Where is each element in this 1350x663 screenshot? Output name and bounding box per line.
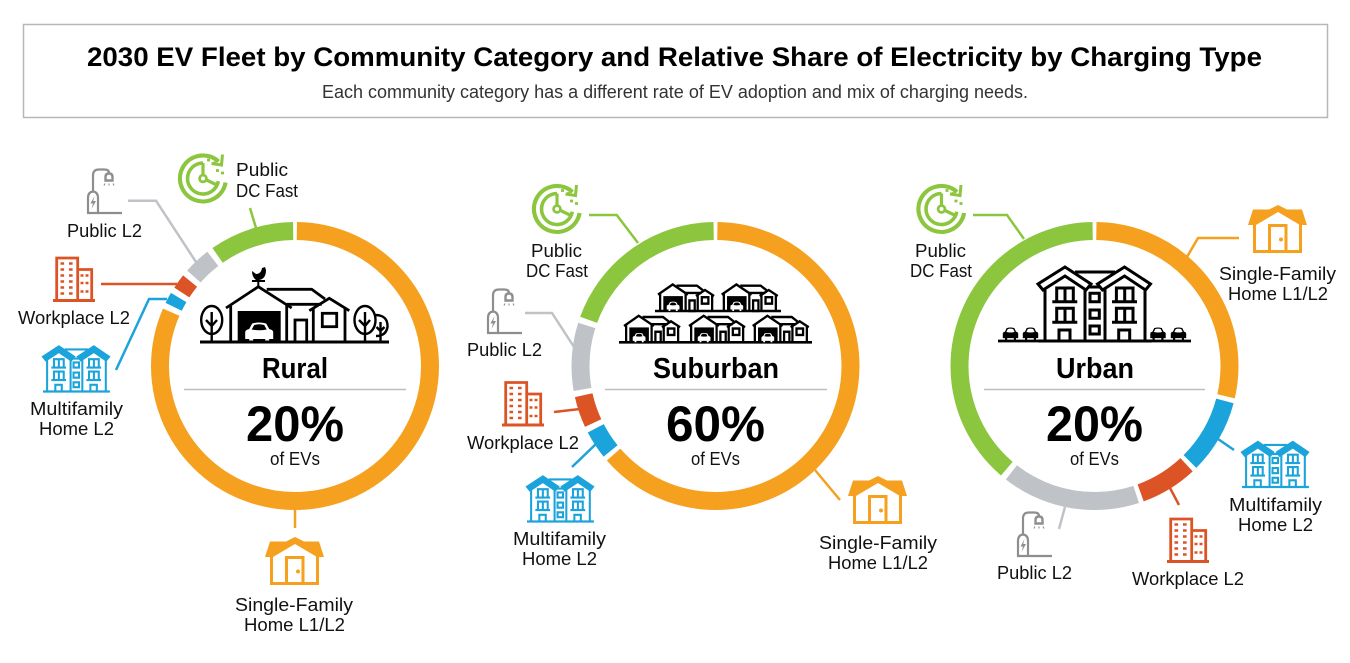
urban name: Urban <box>1056 353 1134 385</box>
urban single-family callout: Home L1/L2 <box>1228 284 1328 304</box>
urban apartment illustration <box>998 267 1191 341</box>
rural workplace L2 callout: Workplace L2 <box>18 308 130 328</box>
rural public DC fast callout <box>180 154 298 228</box>
suburban public DC fast callout: Public <box>531 241 582 261</box>
suburban multifamily callout: Multifamily <box>513 529 606 549</box>
suburban workplace L2 callout <box>467 382 580 453</box>
suburban single-family callout <box>815 470 937 573</box>
panel: urban <box>910 185 1336 589</box>
rural single-family callout: Home L1/L2 <box>244 615 345 635</box>
urban public L2 callout <box>997 507 1072 583</box>
suburban single-family callout: Home L1/L2 <box>828 553 928 573</box>
suburban name: Suburban <box>653 353 779 385</box>
suburban single-family callout: Single-Family <box>819 533 937 553</box>
rural percent: 20% <box>246 396 344 452</box>
title: 2030 EV Fleet by Community Category and Relative Share of Electricity by Charging Type <box>87 42 1262 72</box>
suburban public DC fast callout <box>526 185 638 281</box>
rural of EVs: of EVs <box>270 449 320 469</box>
suburban neighborhood illustration <box>619 284 812 342</box>
rural public L2 callout: Public L2 <box>67 221 142 241</box>
rural multifamily callout: Home L2 <box>39 419 114 439</box>
rural public L2 callout <box>67 170 196 262</box>
rural public DC fast callout: Public <box>236 160 288 180</box>
rural single-family callout <box>235 510 353 635</box>
suburban workplace L2 callout: Workplace L2 <box>467 433 579 453</box>
subtitle: Each community category has a different rate of EV adoption and mix of charging needs. <box>322 82 1028 102</box>
suburban public L2 callout <box>467 290 574 360</box>
title box <box>24 24 1328 118</box>
suburban public L2 callout: Public L2 <box>467 340 542 360</box>
rural multifamily callout: Multifamily <box>30 399 123 419</box>
suburban percent: 60% <box>666 396 765 452</box>
urban multifamily callout: Multifamily <box>1229 495 1322 515</box>
rural name: Rural <box>262 353 328 385</box>
urban public DC fast callout <box>910 185 1024 281</box>
urban public DC fast callout: DC Fast <box>910 261 972 281</box>
rural public DC fast callout: DC Fast <box>236 181 298 201</box>
urban public DC fast callout: Public <box>915 241 966 261</box>
suburban multifamily callout: Home L2 <box>522 549 597 569</box>
rural multifamily callout <box>30 299 167 439</box>
urban workplace L2 callout: Workplace L2 <box>1132 569 1244 589</box>
suburban of EVs: of EVs <box>691 449 740 469</box>
urban workplace L2 callout <box>1132 488 1244 589</box>
urban single-family callout: Single-Family <box>1219 264 1336 284</box>
urban donut chart <box>960 231 1230 501</box>
urban multifamily callout <box>1218 439 1322 535</box>
rural donut chart <box>160 231 430 501</box>
panel: rural <box>18 154 430 635</box>
urban of EVs: of EVs <box>1070 449 1119 469</box>
panel: suburban <box>467 185 937 573</box>
suburban public DC fast callout: DC Fast <box>526 261 588 281</box>
urban percent: 20% <box>1046 396 1143 452</box>
urban multifamily callout: Home L2 <box>1238 515 1313 535</box>
rural single-family callout: Single-Family <box>235 595 353 615</box>
urban public L2 callout: Public L2 <box>997 563 1072 583</box>
urban single-family callout <box>1187 205 1336 304</box>
suburban donut chart <box>580 231 850 501</box>
rural workplace L2 callout <box>18 258 177 328</box>
rural farmhouse illustration <box>200 267 389 342</box>
suburban multifamily callout <box>513 443 606 569</box>
